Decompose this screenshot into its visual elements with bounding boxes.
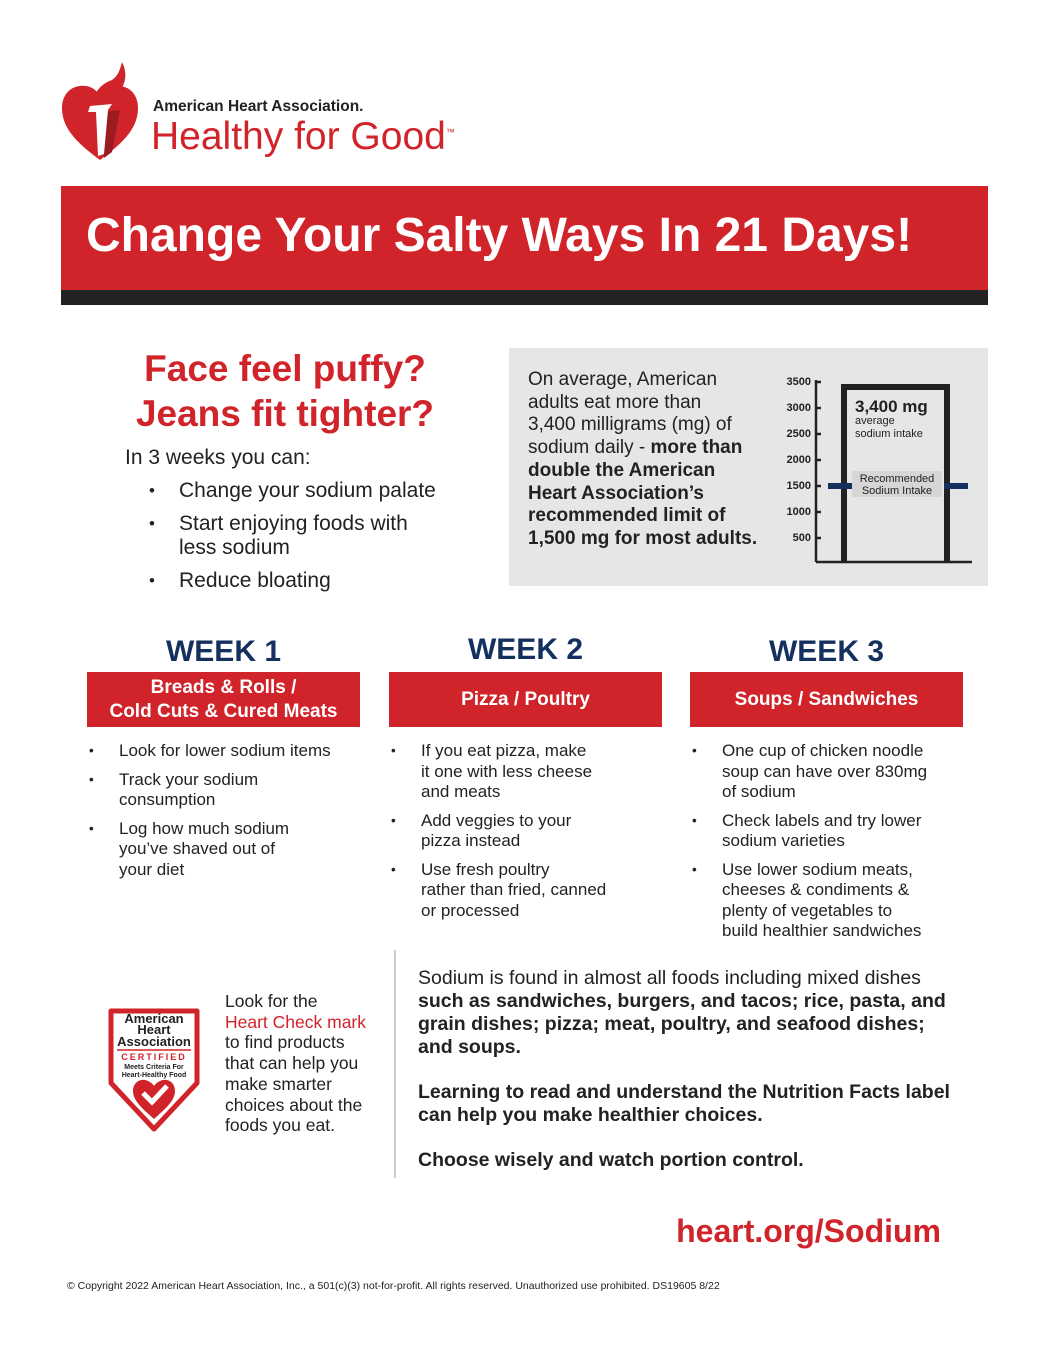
chart: sodium intake: Recommended (860, 473, 934, 485)
week 1: Cold Cuts & Cured Meats (109, 700, 338, 722)
chart: sodium intake: 500 (793, 532, 811, 544)
week 1: Track your sodium (119, 770, 258, 788)
week 3: cheeses & condiments & (722, 880, 909, 899)
heart check text: to find products (225, 1032, 345, 1052)
chart: sodium intake: sodium intake (855, 428, 923, 440)
copyright: © Copyright 2022 American Heart Association, Inc., a 501(c)(3) not-for-profit. All rights reserved. Unauthorized use prohibited. DS19605 8/22 (67, 1280, 720, 1292)
week 1 (87, 635, 360, 878)
week 1: Log how much sodium (119, 818, 289, 838)
heart check text: that can help you (225, 1053, 358, 1073)
icon: heart check badge: Meets Criteria For (124, 1064, 184, 1071)
fact text: Heart Association’s (528, 483, 704, 504)
chart: sodium intake: 3500 (787, 376, 811, 388)
intro list: less sodium (179, 536, 290, 559)
fact text: 1,500 mg for most adults. (528, 528, 757, 549)
week 3: of sodium (722, 782, 796, 801)
week 1: WEEK 1 (166, 635, 281, 668)
chart: sodium intake: 2500 (787, 428, 811, 440)
week 2: Use fresh poultry (421, 860, 550, 878)
sodium info text: Learning to read and understand the Nutrition Facts label (418, 1081, 950, 1103)
week 2: If you eat pizza, make (421, 741, 586, 760)
headline questions: Jeans fit tighter? (136, 393, 434, 434)
week 3: build healthier sandwiches (722, 921, 921, 940)
week 3: Soups / Sandwiches (735, 688, 918, 710)
icon: heart torch (62, 62, 138, 160)
chart: sodium intake: 1500 (787, 480, 811, 492)
fact text (528, 369, 757, 549)
icon: heart check badge: Heart (137, 1022, 171, 1037)
chart: sodium intake (786, 376, 972, 564)
week 3: plenty of vegetables to (722, 900, 892, 920)
intro list: Start enjoying foods with (179, 512, 408, 535)
week 3: Use lower sodium meats, (722, 860, 913, 878)
sodium info text: can help you make healthier choices. (418, 1104, 763, 1126)
title banner: Change Your Salty Ways In 21 Days! (86, 209, 912, 262)
week 1: you’ve shaved out of (119, 839, 275, 858)
week 3: One cup of chicken noodle (722, 741, 923, 760)
week 3: sodium varieties (722, 831, 845, 850)
chart: sodium intake: 2000 (787, 454, 811, 466)
week 1: Breads & Rolls / (151, 676, 296, 698)
heart check text: make smarter (225, 1074, 332, 1094)
week 3: Check labels and try lower (722, 810, 921, 830)
week 2: rather than fried, canned (421, 880, 606, 899)
panel: sodium facts (509, 348, 988, 586)
week 2: Add veggies to your (421, 810, 571, 830)
chart: sodium intake: 3,400 mg (855, 397, 928, 416)
logo: Healthy for Good™ (151, 115, 455, 158)
sodium info text: and soups. (418, 1036, 521, 1058)
heart check text (225, 991, 366, 1135)
week 2: and meats (421, 782, 500, 801)
week 2: pizza instead (421, 831, 520, 850)
week 2: Pizza / Poultry (461, 688, 590, 710)
week 2: it one with less cheese (421, 762, 592, 780)
week 1: your diet (119, 860, 184, 878)
chart: sodium intake: 1000 (787, 506, 811, 518)
sodium info text (418, 967, 950, 1171)
sodium info text: Choose wisely and watch portion control. (418, 1149, 804, 1171)
headline questions (136, 348, 434, 434)
chart: sodium intake: average (855, 415, 895, 427)
week 3 (690, 635, 963, 940)
fact text: adults eat more than (528, 392, 701, 413)
fact text: 3,400 milligrams (mg) of (528, 414, 732, 435)
logo (62, 62, 455, 160)
intro list: Change your sodium palate (179, 479, 436, 502)
week 3: WEEK 3 (769, 635, 884, 668)
intro list: In 3 weeks you can: (125, 446, 311, 469)
week 2 (389, 633, 662, 920)
fact text: sodium daily - more than (528, 437, 742, 458)
chart: sodium intake: Sodium Intake (862, 485, 932, 497)
fact text: double the American (528, 460, 715, 481)
heart check text: Look for the (225, 991, 317, 1011)
fact text: On average, American (528, 369, 717, 390)
url: heart.org/Sodium (676, 1213, 941, 1249)
intro list: Reduce bloating (179, 569, 331, 592)
heart check text: Heart Check mark (225, 1012, 366, 1032)
icon: heart check badge: American (124, 1011, 184, 1026)
icon: heart check badge: Heart-Healthy Food (122, 1072, 186, 1079)
icon: heart check badge: Association (117, 1034, 191, 1049)
chart: sodium intake: 3000 (787, 402, 811, 414)
sodium info text: such as sandwiches, burgers, and tacos; rice, pasta, and (418, 990, 946, 1012)
heart check text: foods you eat. (225, 1115, 335, 1135)
week 2: or processed (421, 900, 519, 920)
heart check text: choices about the (225, 1095, 362, 1115)
icon: heart check badge (108, 1008, 200, 1132)
fact text: recommended limit of (528, 505, 725, 526)
title banner (61, 186, 988, 305)
intro list (125, 446, 436, 592)
brand text: American Heart Association. (153, 98, 363, 115)
week 3: soup can have over 830mg (722, 762, 927, 780)
sodium info text: Sodium is found in almost all foods including mixed dishes (418, 967, 921, 989)
sodium info text: grain dishes; pizza; meat, poultry, and seafood dishes; (418, 1013, 925, 1035)
icon: heart check badge: CERTIFIED (121, 1052, 187, 1062)
week 1: Look for lower sodium items (119, 741, 331, 760)
week 1: consumption (119, 790, 215, 809)
headline questions: Face feel puffy? (144, 348, 426, 389)
week 2: WEEK 2 (468, 633, 583, 666)
